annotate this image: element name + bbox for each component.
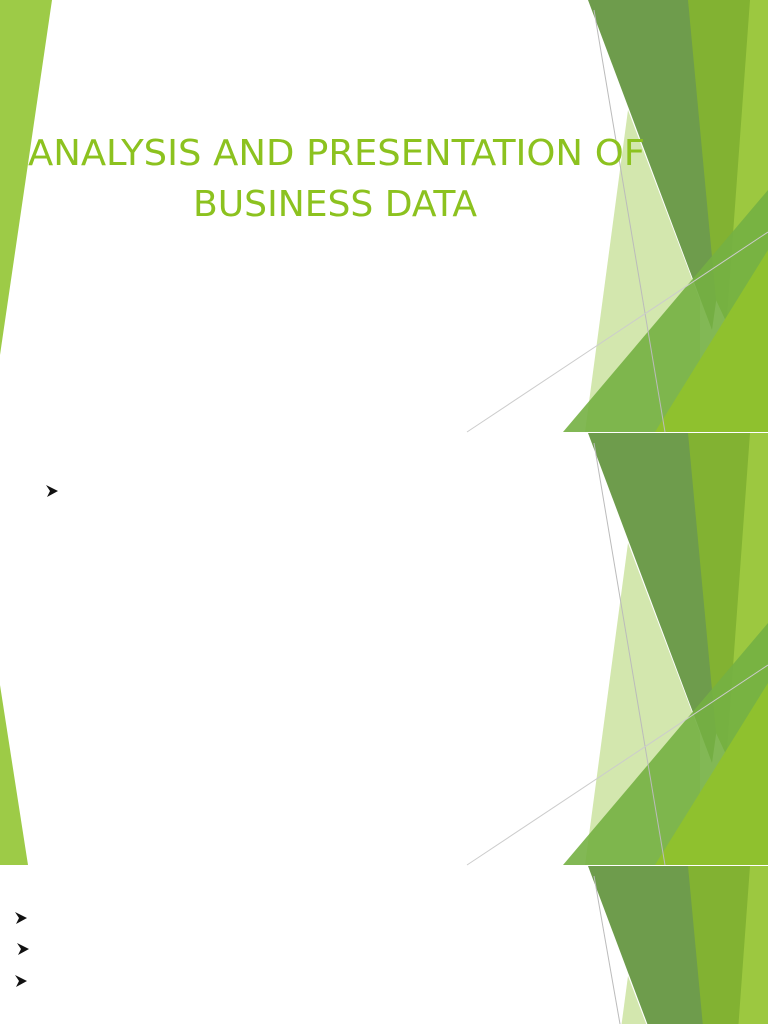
left accent bar [0, 685, 28, 865]
title [28, 133, 645, 225]
title: BUSINESS DATA [193, 184, 477, 225]
right decoration [467, 0, 768, 432]
slide 3 [0, 866, 768, 1024]
left accent bar [0, 0, 52, 355]
right decoration [467, 433, 768, 865]
slide 1 [0, 0, 768, 432]
bullet arrow [46, 485, 58, 497]
bullet arrows [15, 912, 29, 987]
right decoration [585, 866, 768, 1024]
slide 2 [0, 433, 768, 865]
title: ANALYSIS AND PRESENTATION OF [28, 133, 645, 174]
